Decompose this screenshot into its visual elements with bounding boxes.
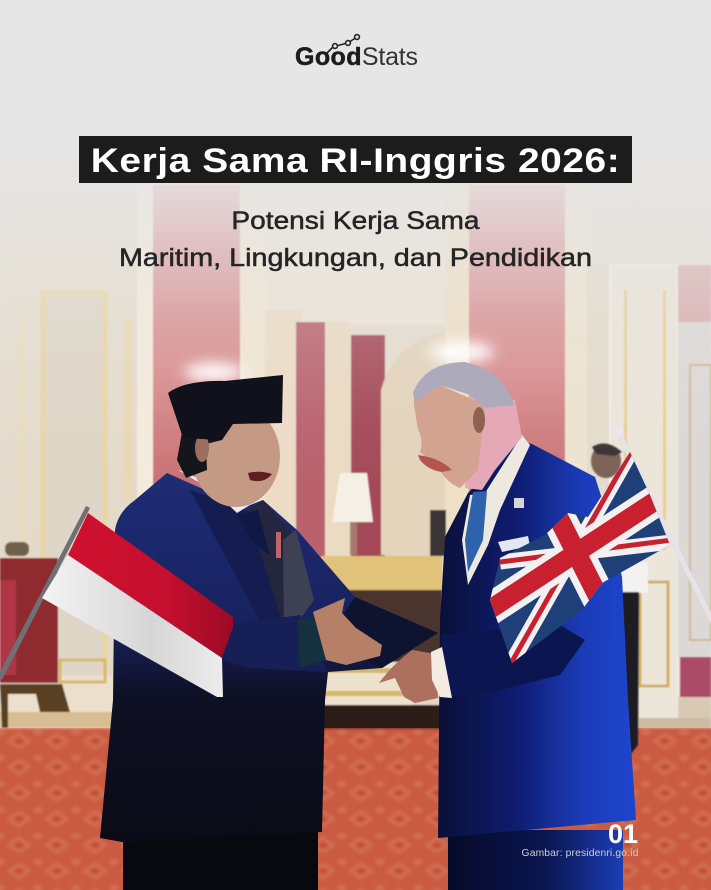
room background xyxy=(0,150,711,748)
cuff and hand xyxy=(297,615,327,668)
trousers xyxy=(123,830,318,890)
black peci hat xyxy=(168,375,283,440)
figure: right leader xyxy=(379,362,636,890)
background figure xyxy=(591,443,648,755)
neck and face xyxy=(465,395,522,490)
icon: Union Jack flag xyxy=(480,426,711,670)
sleeve xyxy=(222,615,328,672)
lapel pin and pocket square xyxy=(514,498,524,508)
image credit: Gambar: presidenri.go.id xyxy=(522,848,638,859)
sleeve xyxy=(441,625,585,697)
lapels and vest xyxy=(190,490,283,625)
light glow behind heads xyxy=(184,342,494,381)
trousers xyxy=(448,830,623,890)
red patterned carpet xyxy=(0,728,711,890)
logo wordmark: GoodStats xyxy=(295,43,418,71)
subtitle line 2: Maritim, Lingkungan, dan Pendidikan xyxy=(119,244,592,272)
head xyxy=(192,405,280,507)
icon: Indonesian flag xyxy=(0,506,233,697)
subtitle line 1: Potensi Kerja Sama xyxy=(231,207,480,235)
shirt cuff and hand xyxy=(379,650,438,703)
logo: GoodStats xyxy=(295,34,418,71)
page number: 01 xyxy=(608,819,638,849)
figure: left leader xyxy=(100,375,438,890)
photo scene: two leaders with flags in a palace room xyxy=(0,185,711,890)
grey hair xyxy=(413,362,514,408)
jacket xyxy=(100,473,438,842)
medal xyxy=(276,532,281,558)
shirt collar and tie xyxy=(178,470,250,513)
jacket xyxy=(438,440,636,838)
wall fade to grey xyxy=(0,0,711,560)
title banner xyxy=(79,136,632,183)
subtitle xyxy=(119,207,592,272)
shirt collar and tie xyxy=(462,435,530,585)
icon: logo trend line xyxy=(326,34,360,54)
title text: Kerja Sama RI-Inggris 2026: xyxy=(91,142,620,180)
